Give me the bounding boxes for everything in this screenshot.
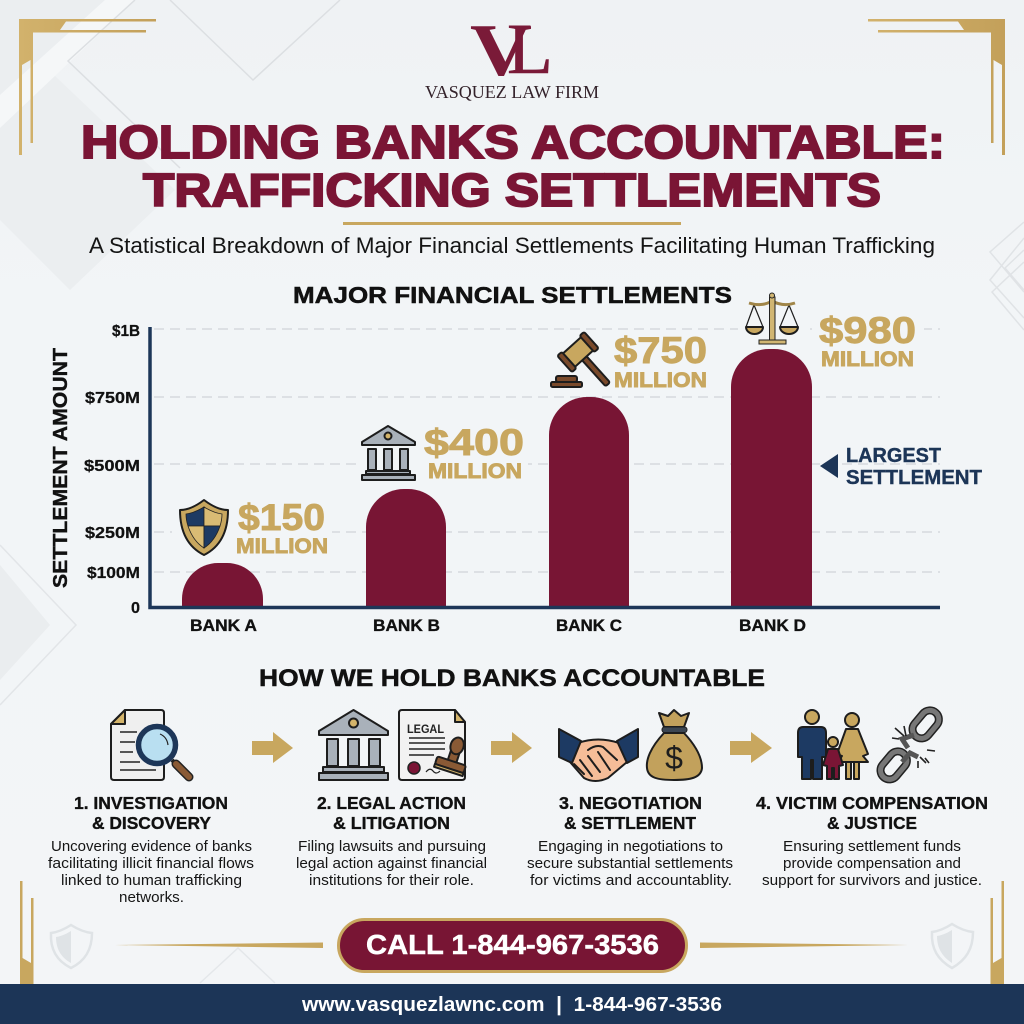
value: $150 million <box>236 497 328 558</box>
icon: scales of justice <box>746 293 798 344</box>
gold corner: bottom right <box>990 881 1004 984</box>
gold line left of call button <box>115 942 323 948</box>
step 2 title <box>317 793 466 833</box>
step 2 description: legal action against financial <box>296 856 487 872</box>
step 2: legal action and litigation <box>296 710 487 889</box>
step 4 description: provide compensation and <box>783 856 961 872</box>
logo: Vasquez Law Firm: VASQUEZ LAW FIRM <box>425 82 599 102</box>
gold corner: top right <box>868 19 1005 155</box>
bar labels: BANK C <box>556 617 622 635</box>
arrow: step 2 to 3 <box>491 732 532 763</box>
value: $150 million: MILLION <box>236 535 328 558</box>
arrow: step 3 to 4 <box>730 732 772 763</box>
value: $750 million: MILLION <box>614 369 707 392</box>
title rule <box>343 222 681 225</box>
y axis labels: $750M <box>85 390 140 407</box>
step 1 description: facilitating illicit financial flows <box>48 856 254 872</box>
icon: courthouse <box>319 710 388 780</box>
step 4 description <box>762 839 982 889</box>
step 3 description: Engaging in negotiations to <box>538 839 723 855</box>
bar labels <box>190 617 806 635</box>
step 3 title: 3. NEGOTIATION <box>559 793 702 813</box>
step 4 title: 4. VICTIM COMPENSATION <box>756 793 988 813</box>
step 4 description: support for survivors and justice. <box>762 873 982 889</box>
step 1 title: 1. INVESTIGATION <box>74 793 228 813</box>
icon: gavel <box>551 332 621 397</box>
bar: Bank D <box>731 349 812 607</box>
subtitle: A Statistical Breakdown of Major Financial Settlements Facilitating Human Trafficking <box>89 233 935 258</box>
value: $400 million <box>424 422 524 483</box>
y axis labels: $100M <box>87 565 140 582</box>
step 4: victim compensation and justice <box>756 707 988 889</box>
icon: money bag: $ <box>665 740 683 776</box>
icon: watermark shield left <box>51 925 92 968</box>
step 3 title <box>559 793 702 833</box>
icon: handshake <box>559 729 638 781</box>
heading: major financial settlements: MAJOR FINANCIAL SETTLEMENTS <box>293 282 732 308</box>
callout: largest settlement: SETTLEMENT <box>846 467 982 489</box>
step 2 description: Filing lawsuits and pursuing <box>298 839 486 855</box>
step 1 title <box>74 793 228 833</box>
icon: document with magnifier <box>111 710 189 780</box>
logo: Vasquez Law Firm <box>425 9 599 102</box>
bar labels: BANK B <box>373 617 440 635</box>
y axis labels <box>84 323 140 617</box>
step 3 description: for victims and accountablity. <box>530 873 732 889</box>
y axis labels: 0 <box>131 600 140 617</box>
y axis title: SETTLEMENT AMOUNT <box>50 348 72 588</box>
step 3 description <box>527 839 733 889</box>
bar: Bank B <box>366 489 446 607</box>
step 1 description: linked to human trafficking <box>61 873 242 889</box>
value: $150 million: $150 <box>238 497 325 538</box>
call to action button: CALL 1-844-967-3536 <box>366 929 659 960</box>
bar: Bank C <box>549 397 629 607</box>
icon: money bag <box>647 710 702 780</box>
title: HOLDING BANKS ACCOUNTABLE: <box>81 116 945 168</box>
step 3: negotiation and settlement <box>527 710 733 889</box>
call to action button <box>338 920 686 972</box>
value: $980 million <box>819 310 916 371</box>
callout: largest settlement: LARGEST <box>846 445 941 467</box>
icon: watermark shield right <box>932 924 973 968</box>
step 1 description: Uncovering evidence of banks <box>51 839 252 855</box>
bar: Bank A <box>182 563 263 607</box>
step 4 description: Ensuring settlement funds <box>783 839 961 855</box>
icon: legal document with stamp <box>399 710 474 780</box>
arrow: step 1 to 2 <box>252 732 293 763</box>
gold line right of call button <box>700 942 908 948</box>
gold corner: bottom left <box>20 881 34 984</box>
gold corner: top left <box>19 19 156 155</box>
y axis labels: $250M <box>85 525 140 542</box>
heading: how we hold banks accountable: HOW WE HOLD BANKS ACCOUNTABLE <box>259 665 765 692</box>
footer bar: www.vasquezlawnc.com | 1-844-967-3536 <box>301 994 722 1016</box>
step 3 title: & SETTLEMENT <box>564 813 696 833</box>
step 1 description <box>48 839 254 906</box>
icon: family <box>798 710 868 779</box>
value: $980 million: $980 <box>819 310 916 351</box>
step 4 title: & JUSTICE <box>827 813 917 833</box>
step 4 title <box>756 793 988 833</box>
logo: Vasquez Law Firm: L <box>507 9 553 89</box>
y axis labels: $1B <box>112 323 140 340</box>
step 2 description <box>296 839 487 889</box>
logo: Vasquez Law Firm: V <box>470 10 532 92</box>
step 2 title: 2. LEGAL ACTION <box>317 793 466 813</box>
axes <box>150 327 940 608</box>
icon: broken chain <box>877 707 943 783</box>
y axis labels: $500M <box>84 458 140 475</box>
bar labels: BANK D <box>739 617 806 635</box>
step 2 description: institutions for their role. <box>309 873 474 889</box>
icon: bank <box>362 426 415 480</box>
step 2 title: & LITIGATION <box>333 813 450 833</box>
icon: shield <box>180 500 228 555</box>
callout: largest settlement <box>820 445 982 489</box>
title: TRAFFICKING SETTLEMENTS <box>143 164 881 216</box>
value: $750 million: $750 <box>614 330 707 371</box>
bar chart <box>50 293 982 635</box>
step 3 description: secure substantial settlements <box>527 856 733 872</box>
bar labels: BANK A <box>190 617 257 635</box>
value: $750 million <box>614 330 707 392</box>
icon: legal document with stamp: LEGAL <box>407 724 444 736</box>
value: $400 million: MILLION <box>428 460 522 483</box>
step 1 title: & DISCOVERY <box>92 813 211 833</box>
step 1: investigation and discovery <box>48 710 254 906</box>
title <box>81 116 945 216</box>
step 1 description: networks. <box>119 890 184 906</box>
footer bar <box>0 984 1024 1024</box>
value: $980 million: MILLION <box>821 348 914 371</box>
value: $400 million: $400 <box>424 422 524 463</box>
